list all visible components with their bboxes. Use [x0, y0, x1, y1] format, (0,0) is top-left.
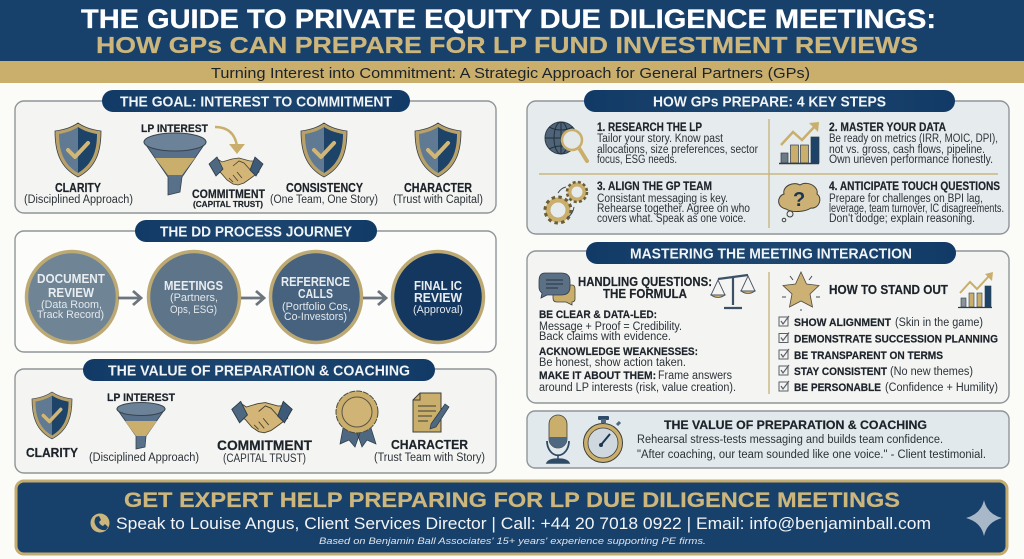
formula text: Be honest, show action taken. — [539, 357, 686, 369]
clarity label — [24, 181, 133, 206]
value text: THE VALUE OF PREPARATION & COACHING — [664, 420, 927, 432]
icon: stopwatch — [584, 416, 622, 462]
step: meetings: Ops, ESG) — [170, 304, 217, 316]
step 3: align the gp team: Rehearse together. Agree on who — [597, 203, 750, 215]
checklist: SHOW ALIGNMENT — [794, 317, 891, 329]
step 3: align the gp team — [597, 181, 750, 225]
icon: growth chart small — [958, 272, 993, 308]
step 1: research the lp: Tailor your story. Know past — [597, 133, 724, 145]
step 4: anticipate tough questions: Prepare for challenges on BPI lag, — [829, 193, 983, 205]
source note: Based on Benjamin Ball Associates' 15+ years' experience supporting PE firms. — [319, 536, 706, 547]
panel: value of preparation left — [15, 359, 496, 473]
tagline band: Turning Interest into Commitment: A Strategic Approach for General Partners (GPs) — [211, 66, 810, 82]
icon: handshake — [209, 157, 263, 185]
heading: mastering — [586, 242, 956, 264]
step: final ic review: FINAL IC — [414, 279, 462, 293]
formula text: BE CLEAR & DATA-LED: — [539, 309, 657, 321]
icon: gears — [545, 182, 587, 223]
step 2: master your data: 2. MASTER YOUR DATA — [829, 122, 946, 134]
consistency label: (One Team, One Story) — [270, 194, 378, 206]
character label — [393, 181, 483, 206]
handling questions heading — [578, 275, 712, 301]
step 1: research the lp: allocations, size preferences, sector — [597, 144, 758, 156]
icon: funnel — [117, 402, 165, 449]
checklist: (No new themes) — [890, 366, 973, 378]
icon: speech bubbles — [539, 273, 575, 305]
panel: how gps prepare — [527, 90, 1009, 234]
formula text: ACKNOWLEDGE WEAKNESSES: — [539, 346, 698, 358]
value text: Rehearsal stress-tests messaging and builds team confidence. — [637, 434, 943, 446]
step: document review: Track Record) — [37, 309, 104, 321]
icon: thought bubble question — [779, 183, 820, 222]
step 2: master your data: Be ready on metrics (IRR, MOIC, DPI), — [829, 133, 998, 145]
tagline band — [0, 61, 1024, 83]
heading: value of preparation: THE VALUE OF PREPARATION & COACHING — [108, 362, 410, 380]
formula text: Frame answers — [658, 370, 732, 382]
formula text: Back claims with evidence. — [539, 331, 671, 343]
step: document review — [26, 252, 118, 342]
checklist: BE PERSONABLE — [794, 382, 881, 394]
step 3: align the gp team: covers what. Speak as one voice. — [597, 213, 746, 225]
commitment label: (CAPITAL TRUST) — [223, 453, 306, 465]
step: meetings: MEETINGS — [164, 279, 223, 293]
step: document review: (Data Room, — [41, 299, 102, 311]
step: reference calls — [270, 252, 362, 342]
icon: microphone — [547, 415, 569, 463]
step: reference calls: Co-Investors) — [284, 311, 347, 323]
step 3: align the gp team: Consistant messaging is key. — [597, 193, 728, 205]
icon: star — [782, 272, 820, 311]
icon: growth chart — [779, 122, 819, 164]
icon: funnel — [144, 133, 206, 195]
checklist: DEMONSTRATE SUCCESSION PLANNING — [794, 334, 998, 346]
character label: (Trust with Capital) — [393, 194, 483, 206]
icon: clarity shield — [32, 392, 72, 439]
value text — [637, 420, 986, 461]
icon: thought bubble question: ? — [793, 189, 805, 211]
heading: 4 key steps: HOW GPs PREPARE: 4 KEY STEPS — [653, 94, 886, 110]
checklist: STAY CONSISTENT — [794, 366, 887, 378]
value text: "After coaching, our team sounded like one voice." - Client testimonial. — [637, 449, 986, 461]
heading: mastering: MASTERING THE MEETING INTERACTION — [630, 246, 912, 262]
step 2: master your data: not vs. gross, cash flows, pipeline. — [829, 144, 985, 156]
clarity label: CLARITY — [55, 181, 102, 195]
step: reference calls: CALLS — [298, 287, 333, 301]
handling questions heading: THE FORMULA — [603, 287, 687, 301]
clarity label: CLARITY — [26, 445, 78, 460]
icon: clarity shield — [55, 123, 101, 177]
contact line: Speak to Louise Angus, Client Services Director | Call: +44 20 7018 0922 | Email: info@benjaminball.com — [116, 514, 931, 533]
heading: dd process: THE DD PROCESS JOURNEY — [160, 224, 352, 240]
heading: 4 key steps — [584, 90, 955, 112]
step: final ic review — [392, 252, 484, 342]
step: final ic review: REVIEW — [414, 291, 462, 305]
formula text: around LP interests (risk, value creation). — [539, 382, 736, 394]
formula text: Message + Proof = Credibility. — [539, 321, 682, 333]
arrow 3 — [363, 291, 386, 305]
icon: globe and magnifier — [545, 122, 587, 161]
handling questions heading: HANDLING QUESTIONS: — [578, 275, 712, 289]
step 1: research the lp: 1. RESEARCH THE LP — [597, 122, 702, 134]
how to stand out heading: HOW TO STAND OUT — [829, 283, 948, 297]
step 1: research the lp — [597, 122, 758, 166]
checklist: (Confidence + Humility) — [885, 382, 998, 394]
title: THE GUIDE TO PRIVATE EQUITY DUE DILIGENCE MEETINGS: — [81, 4, 936, 34]
commitment label: (CAPITAL TRUST) — [193, 199, 263, 209]
step: meetings: (Partners, — [170, 292, 218, 304]
checklist: BE TRANSPARENT ON TERMS — [794, 350, 943, 362]
clarity label: (Disciplined Approach) — [24, 194, 133, 206]
heading: dd process — [135, 220, 377, 242]
step 4: anticipate tough questions: Don't dodge; explain reasoning. — [829, 213, 975, 225]
consistency label: CONSISTENCY — [286, 181, 364, 195]
step 2: master your data: Own uneven performance honestly. — [829, 154, 993, 166]
character label: (Trust Team with Story) — [374, 452, 485, 464]
step: reference calls: (Portfolio Cos, — [282, 301, 351, 313]
step 1: research the lp: focus, ESG needs. — [597, 154, 677, 166]
panel: mastering the meeting interaction — [527, 242, 1009, 403]
icon: document and pencil — [413, 393, 449, 432]
disciplined approach label: (Disciplined Approach) — [89, 452, 199, 464]
step 3: align the gp team: 3. ALIGN THE GP TEAM — [597, 181, 712, 193]
icon: character shield — [415, 123, 461, 177]
subtitle: HOW GPs CAN PREPARE FOR LP FUND INVESTMENT REVIEWS — [96, 32, 918, 58]
commitment label: COMMITMENT — [217, 437, 312, 453]
step 4: anticipate tough questions — [829, 181, 1004, 225]
heading: the goal: THE GOAL: INTEREST TO COMMITMENT — [120, 94, 392, 110]
header banner — [0, 0, 1024, 61]
step: document review: DOCUMENT — [37, 272, 105, 286]
commitment label — [192, 187, 266, 209]
step: document review: REVIEW — [48, 286, 94, 300]
icon: handshake — [232, 401, 292, 433]
arrow 1 — [118, 291, 141, 305]
formula text: MAKE IT ABOUT THEM: — [539, 370, 656, 382]
icon: sparkle — [966, 500, 1002, 536]
step: reference calls: REFERENCE — [281, 275, 350, 289]
consistency label — [270, 181, 378, 206]
panel: the goal — [15, 90, 496, 213]
lp interest label: LP INTEREST — [107, 392, 175, 404]
footer call to action — [16, 481, 1007, 554]
character label: CHARACTER — [391, 437, 469, 452]
commitment label: COMMITMENT — [192, 187, 266, 201]
step: meetings — [148, 252, 240, 342]
character label — [374, 437, 485, 464]
footer heading: GET EXPERT HELP PREPARING FOR LP DUE DILIGENCE MEETINGS — [124, 489, 900, 512]
panel: dd process journey — [15, 220, 496, 352]
icon: medal — [336, 391, 378, 447]
arrow: interest to commitment — [215, 127, 245, 154]
icon: scales — [711, 275, 755, 308]
formula text — [539, 309, 736, 394]
lp interest label: LP INTEREST — [141, 123, 208, 135]
panel: value of preparation right — [527, 411, 1009, 468]
step 4: anticipate tough questions: 4. ANTICIPATE TOUCH QUESTIONS — [829, 181, 1000, 193]
commitment label — [217, 437, 312, 465]
icon: phone — [90, 514, 110, 532]
checklist: (Skin in the game) — [895, 317, 983, 329]
icon: consistency shield — [301, 123, 347, 177]
character label: CHARACTER — [404, 181, 472, 195]
step: final ic review: (Approval) — [413, 304, 463, 316]
checklist — [779, 316, 998, 394]
step 2: master your data — [829, 122, 998, 166]
arrow 2 — [241, 291, 264, 305]
